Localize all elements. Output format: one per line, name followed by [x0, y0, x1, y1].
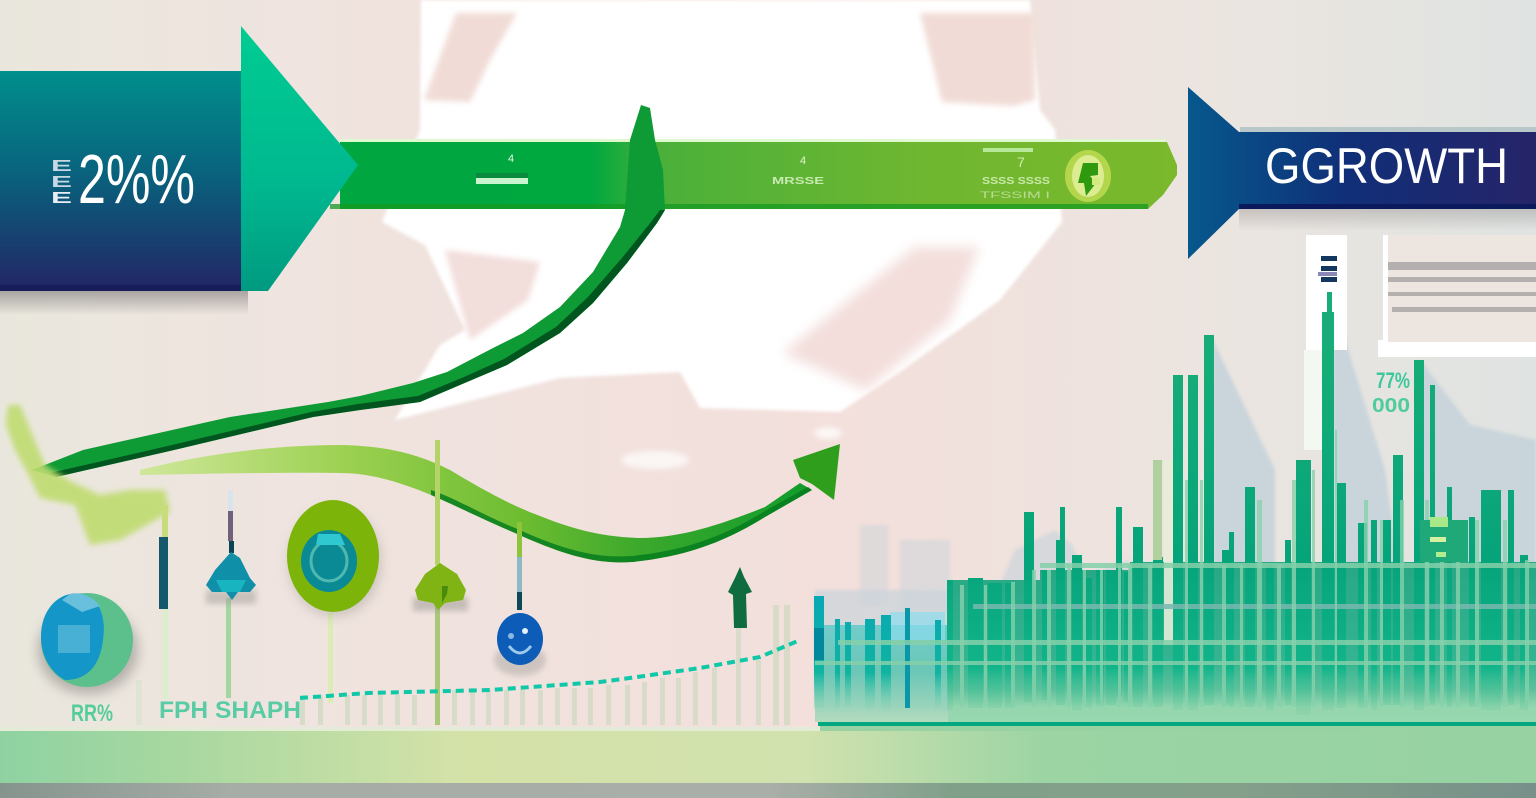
icon: blue smile	[494, 613, 546, 676]
top-right note panel	[1304, 235, 1536, 450]
icon: chart marker	[1420, 517, 1468, 562]
green bars	[815, 292, 1536, 722]
growth banner	[1188, 87, 1536, 259]
band label: third: 7	[1017, 154, 1025, 170]
note icon	[1318, 256, 1337, 282]
main curved arrow	[32, 105, 665, 477]
band label: first: 4	[508, 153, 514, 165]
chart values	[1372, 368, 1410, 417]
floor band	[0, 726, 1536, 798]
bar chart	[814, 292, 1536, 726]
left banner	[0, 26, 358, 291]
axis labels: FPH SHAPH	[159, 697, 301, 724]
baseline	[818, 722, 1536, 726]
growth heading: GGROWTH	[1265, 138, 1508, 194]
note lines	[1388, 262, 1536, 312]
pale tick marks	[300, 605, 790, 725]
band label: second	[772, 155, 824, 187]
icon: dark up arrow	[728, 567, 752, 628]
banner arrowhead	[241, 26, 358, 291]
pale upper spike	[1153, 460, 1162, 560]
icon: blue circle	[38, 593, 138, 694]
horizontal grid lines	[815, 563, 1536, 665]
banner value: E	[51, 190, 73, 207]
teal bars	[814, 596, 950, 722]
band label: third	[980, 148, 1050, 200]
band label: first	[476, 153, 528, 184]
shadow under left banner	[0, 291, 248, 315]
green horizontal band	[330, 139, 1177, 209]
vertical grid lines	[960, 430, 1529, 707]
icon: teal arrow	[206, 552, 256, 604]
icon: green oval with teal core	[287, 500, 381, 616]
pale skyline behind chart	[815, 300, 1536, 710]
icon: green leaf drop	[413, 563, 468, 611]
banner value: 2%%	[78, 140, 195, 218]
chart values: 000	[1372, 395, 1410, 417]
banner value: E	[51, 158, 73, 175]
ribbon arrowhead	[793, 444, 840, 500]
left leaf	[6, 405, 170, 545]
icon: band badge	[1065, 150, 1111, 202]
dashed trend line	[300, 640, 800, 698]
chart values: 77%	[1376, 368, 1410, 393]
band label: second: 4	[800, 155, 806, 167]
band label: third: TFSSIM I	[980, 190, 1050, 200]
banner value: E	[51, 174, 73, 191]
band label: second: MRSSE	[772, 176, 824, 187]
band label: third: SSSS SSSS	[982, 176, 1050, 187]
stems	[136, 440, 522, 725]
banner value	[51, 140, 195, 218]
axis labels	[71, 697, 301, 727]
axis labels: RR%	[71, 700, 113, 727]
second ribbon arrow	[140, 444, 840, 562]
